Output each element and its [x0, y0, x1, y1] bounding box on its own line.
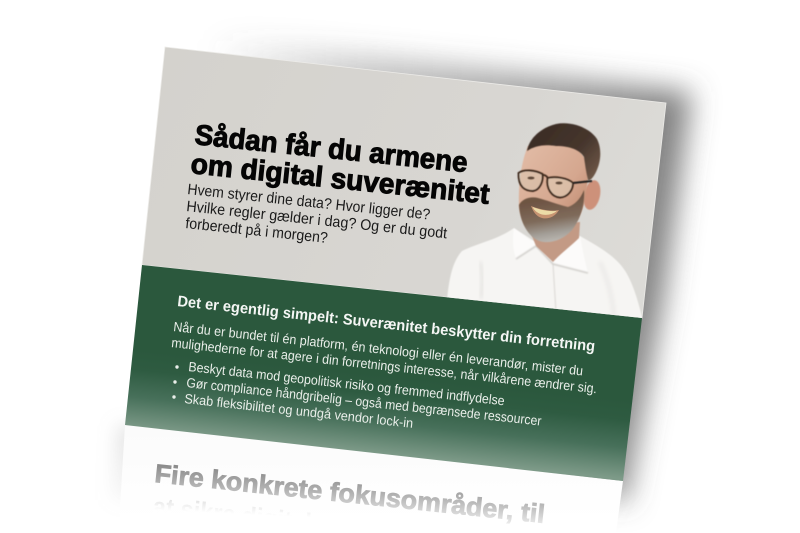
panel: green section	[125, 265, 642, 481]
portrait photo	[447, 123, 644, 325]
bullet list: Beskyt data mod geopolitisk risiko og fremmed indflydelse	[188, 359, 505, 408]
intro text: forberedt på i morgen?	[185, 215, 329, 247]
ear	[584, 180, 601, 210]
eyes	[528, 177, 562, 184]
hair	[527, 123, 600, 180]
page: reflected white lower part	[118, 425, 623, 533]
mouth	[531, 206, 559, 218]
bullet list: Skab fleksibilitet og undgå vendor lock-in	[184, 391, 414, 431]
title	[189, 119, 491, 211]
title: Sådan får du armene	[193, 119, 469, 179]
bullet list: Gør compliance håndgribelig – også med begrænsede ressourcer	[186, 375, 543, 429]
intro text: Hvilke regler gælder i dag? Og er du godt	[186, 198, 449, 242]
faded heading in reflection: Fire konkrete fokusområder, til	[153, 458, 546, 529]
neck	[528, 222, 580, 262]
intro text	[185, 181, 449, 247]
glasses	[518, 170, 592, 198]
shirt	[447, 228, 644, 325]
page shadow	[112, 38, 692, 525]
bullet list	[172, 359, 543, 431]
green section body text: Når du er bundet til én platform, én teknologi eller én leverandør, mister du	[173, 319, 584, 378]
title: om digital suverænitet	[189, 148, 491, 211]
beard	[519, 190, 584, 242]
green section body text: mulighederne for at agere i din forretnings interesse, når vilkårene ændrer sig.	[171, 335, 598, 396]
green section heading: Det er egentlig simpelt: Suverænitet beskytter din forretning	[177, 293, 596, 355]
intro text: Hvem styrer dine data? Hvor ligger de?	[187, 181, 431, 223]
face	[518, 144, 588, 218]
page: upper beige panel	[142, 47, 666, 318]
brochure page	[118, 47, 666, 533]
